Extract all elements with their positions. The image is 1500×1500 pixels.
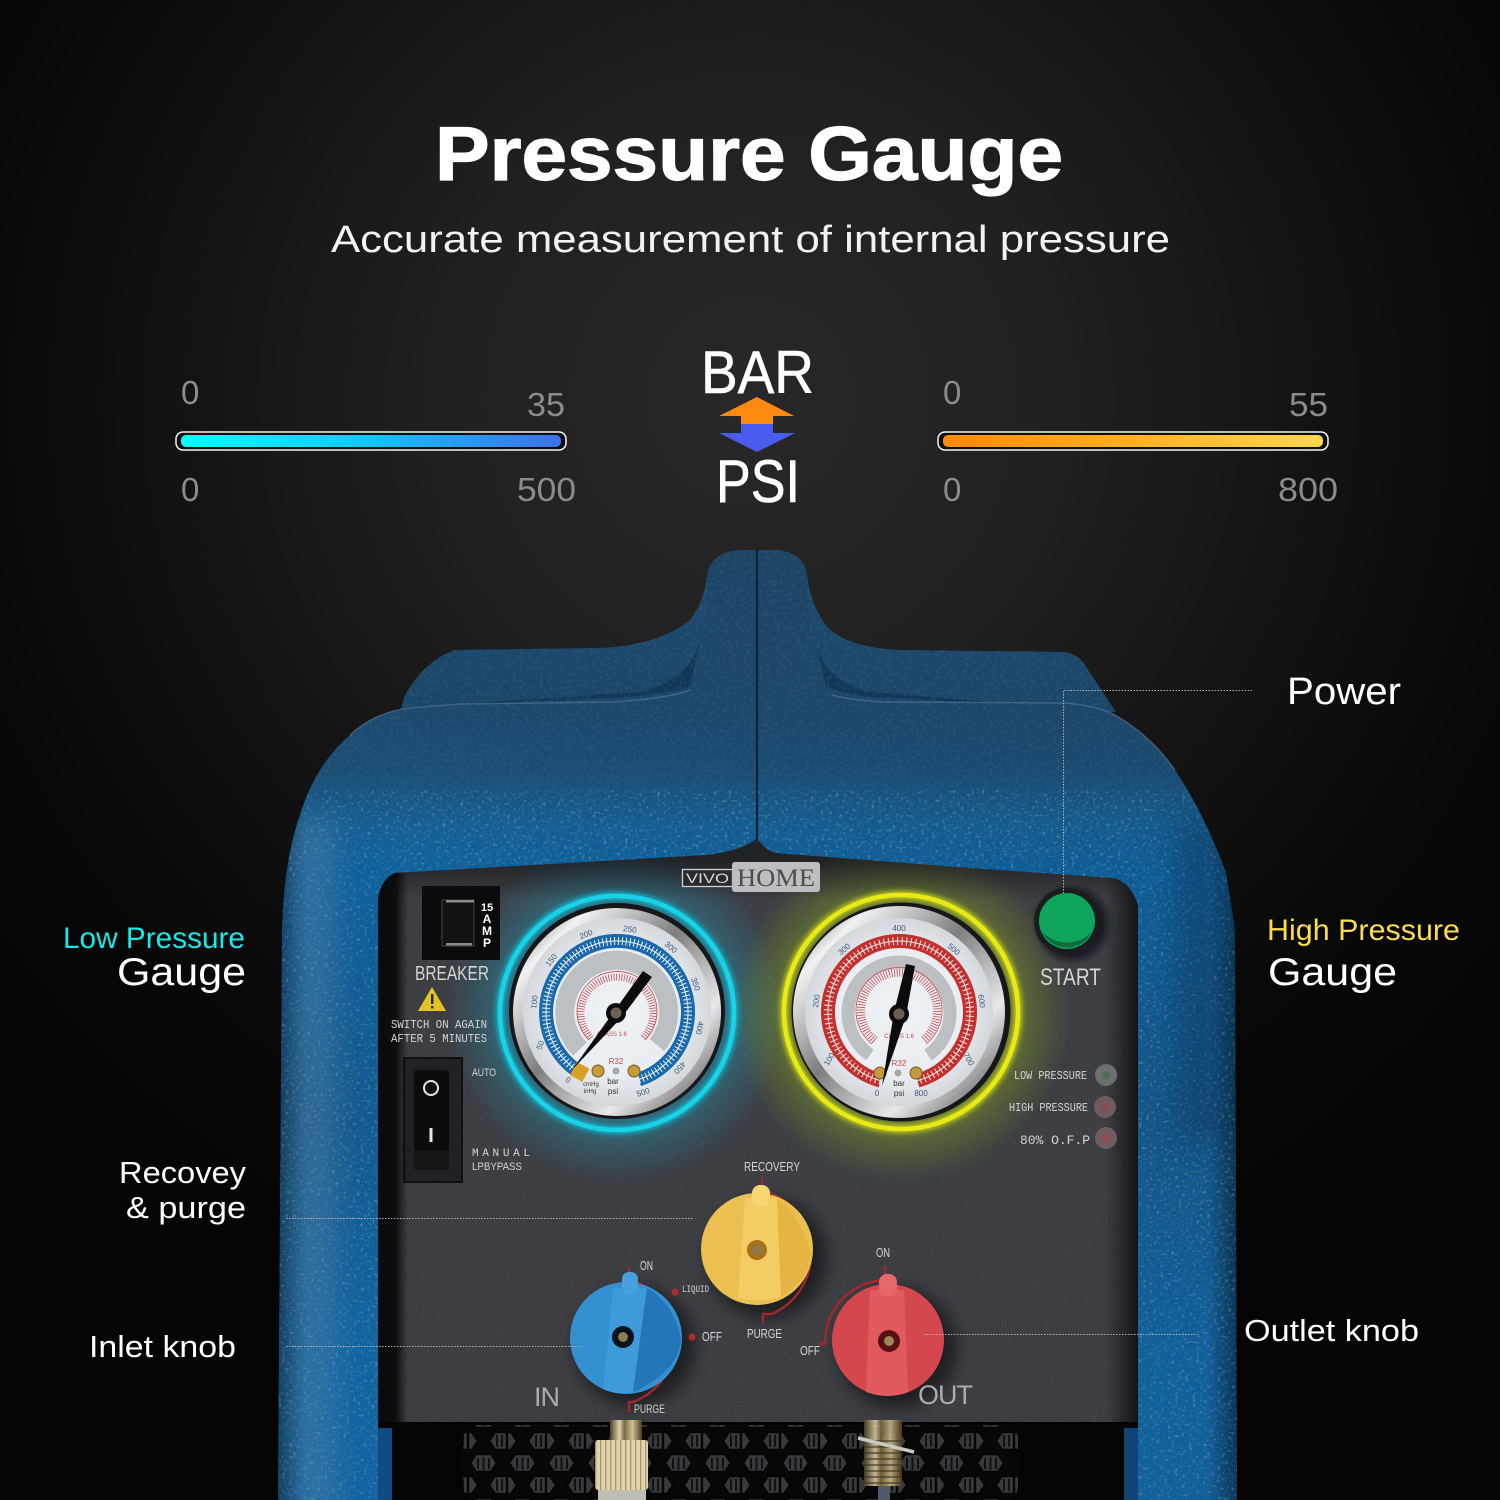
dial numbers: 400 [694, 1021, 705, 1036]
subtitle: Accurate measurement of internal pressure [331, 219, 1170, 261]
dial numbers: 150 [544, 952, 559, 968]
callout: power: Power [1287, 671, 1401, 713]
bezel [792, 902, 1010, 1122]
cyan ring [500, 896, 734, 1130]
outlet fitting [858, 1420, 914, 1500]
high pressure scale bar: 0 [943, 471, 961, 508]
highlight edge of front shell [350, 690, 1175, 770]
vent grille with fittings [463, 1420, 1018, 1500]
blue scale [546, 941, 688, 1080]
indicator lights: LOW PRESSURE [1014, 1069, 1087, 1083]
shell texture [278, 550, 1238, 1500]
dial numbers: 200 [578, 928, 595, 941]
breaker switch: P [483, 936, 491, 950]
dial numbers: 300 [663, 940, 679, 955]
switch labels: AUTO [472, 1067, 496, 1079]
dial numbers: CLASS 1.6 [884, 1034, 915, 1040]
recovery knob: PURGE [747, 1326, 782, 1341]
rocker switch [404, 1058, 462, 1182]
start label: START [1040, 964, 1101, 991]
dial numbers: R32 [609, 1057, 624, 1066]
dial numbers: psi [894, 1089, 904, 1098]
low pressure scale bar [176, 374, 576, 508]
brand logo: VIVO [686, 870, 729, 886]
dial numbers: 700 [961, 1051, 976, 1068]
breaker label: BREAKER [415, 963, 489, 985]
dial numbers [529, 924, 705, 1099]
start button [1034, 888, 1108, 960]
dial numbers: 0 [563, 1074, 573, 1085]
callout: recovery and purge: Recovey [119, 1155, 247, 1190]
dial numbers: 0 [875, 1089, 880, 1098]
callout: recovery and purge: & purge [126, 1190, 246, 1225]
breaker switch [422, 886, 500, 960]
high pressure scale bar [938, 374, 1338, 508]
needle [572, 971, 652, 1070]
dial numbers: CLASS 1.6 [597, 1032, 628, 1038]
dial numbers: 500 [635, 1086, 651, 1099]
inlet knob: PURGE [634, 1402, 665, 1416]
outlet knob: OUT [918, 1380, 973, 1410]
dial numbers: 200 [811, 993, 822, 1008]
indicator lights: HIGH PRESSURE [1009, 1101, 1088, 1115]
front shell [278, 550, 1237, 1500]
center seam [756, 549, 758, 840]
switch labels: MANUAL [472, 1148, 530, 1160]
callout: recovery and purge [119, 1155, 693, 1225]
switch labels [472, 1067, 530, 1173]
dial numbers: 350 [689, 976, 702, 992]
lower opening on chassis [378, 1422, 1138, 1500]
callout: high pressure gauge: Gauge [1268, 951, 1397, 994]
warning text: SWITCH ON AGAIN [391, 1018, 487, 1032]
inlet knob [534, 1258, 722, 1416]
warning icon [418, 987, 446, 1011]
dial numbers: 250 [623, 924, 638, 935]
dial numbers: inHg [584, 1089, 596, 1095]
dial numbers: 500 [946, 942, 962, 958]
inlet knob: OFF [702, 1329, 722, 1344]
outlet knob: OFF [800, 1343, 820, 1358]
low pressure scale bar: 0 [181, 471, 199, 508]
inlet knob: ON [640, 1258, 653, 1273]
dial numbers: 300 [836, 941, 853, 957]
callout: low pressure gauge: Low Pressure [63, 922, 245, 955]
warning text: AFTER 5 MINUTES [391, 1032, 487, 1046]
dial numbers: bar [607, 1077, 619, 1086]
bezel [509, 903, 725, 1119]
recovery knob [701, 1159, 827, 1341]
inlet knob: LIQUID [682, 1285, 709, 1296]
rear housing with handle [400, 550, 1116, 712]
callout: power [1064, 671, 1401, 893]
inlet knob: IN [534, 1382, 560, 1412]
outlet knob [800, 1245, 973, 1410]
unit conversion: BAR and PSI: BAR [701, 339, 814, 406]
red temperature scale [581, 977, 653, 1038]
breaker switch: M [482, 924, 492, 938]
callout: high pressure gauge: High Pressure [1267, 914, 1460, 947]
callout: high pressure gauge [1267, 914, 1460, 994]
callout: low pressure gauge: Gauge [117, 951, 246, 994]
red temperature scale [861, 973, 937, 1040]
dial numbers: 100 [822, 1051, 837, 1067]
title: Pressure Gauge [435, 112, 1063, 197]
dial numbers: 800 [914, 1089, 928, 1098]
gray band [848, 962, 950, 1055]
breaker switch: A [483, 912, 492, 926]
right inner strip [1124, 1428, 1138, 1500]
dial numbers: 50 [535, 1039, 547, 1051]
callout: low pressure gauge [63, 922, 246, 994]
dial numbers: 450 [671, 1060, 687, 1076]
dial numbers: R32 [892, 1059, 907, 1068]
high pressure scale bar: 55 [1289, 386, 1328, 423]
control panel [378, 835, 1138, 1425]
needle [882, 964, 915, 1086]
low pressure scale bar: 500 [517, 471, 576, 508]
indicator lights [1009, 1064, 1117, 1149]
high pressure scale bar: 800 [1278, 471, 1338, 508]
dial numbers [811, 924, 987, 1098]
high pressure scale bar: 0 [943, 374, 961, 411]
warning text [391, 1018, 487, 1046]
indicator lights: 80% O.F.P [1020, 1133, 1090, 1148]
dial numbers: cmHg [583, 1082, 599, 1088]
dial numbers: 400 [892, 924, 906, 933]
left inner strip [378, 1428, 392, 1500]
dial numbers: 100 [529, 994, 540, 1009]
dial numbers: 600 [976, 994, 987, 1009]
yellow stop [570, 1062, 589, 1082]
low pressure scale bar: 0 [181, 374, 199, 411]
unit conversion: BAR and PSI: PSI [716, 448, 800, 515]
brand logo [682, 862, 820, 892]
low pressure scale bar: 35 [527, 386, 565, 423]
inlet fitting [595, 1420, 648, 1500]
dial numbers: psi [608, 1087, 618, 1096]
dial numbers: bar [893, 1079, 905, 1088]
machine body [278, 549, 1238, 1500]
crease shadow behind front shell [400, 640, 1116, 712]
gray band [565, 960, 669, 1049]
brand logo: HOME [737, 865, 815, 892]
unit conversion: BAR and PSI [701, 339, 814, 515]
callout: inlet knob: Inlet knob [89, 1329, 236, 1364]
switch labels: LPBYPASS [472, 1161, 522, 1173]
recovery knob: RECOVERY [744, 1159, 800, 1174]
red scale [828, 941, 970, 1081]
breaker switch: 15 [481, 902, 493, 914]
yellow ring [784, 895, 1018, 1129]
low pressure gauge [500, 896, 734, 1130]
high pressure gauge [784, 895, 1018, 1129]
callout: outlet knob: Outlet knob [1244, 1313, 1419, 1348]
outlet knob: ON [876, 1245, 890, 1260]
